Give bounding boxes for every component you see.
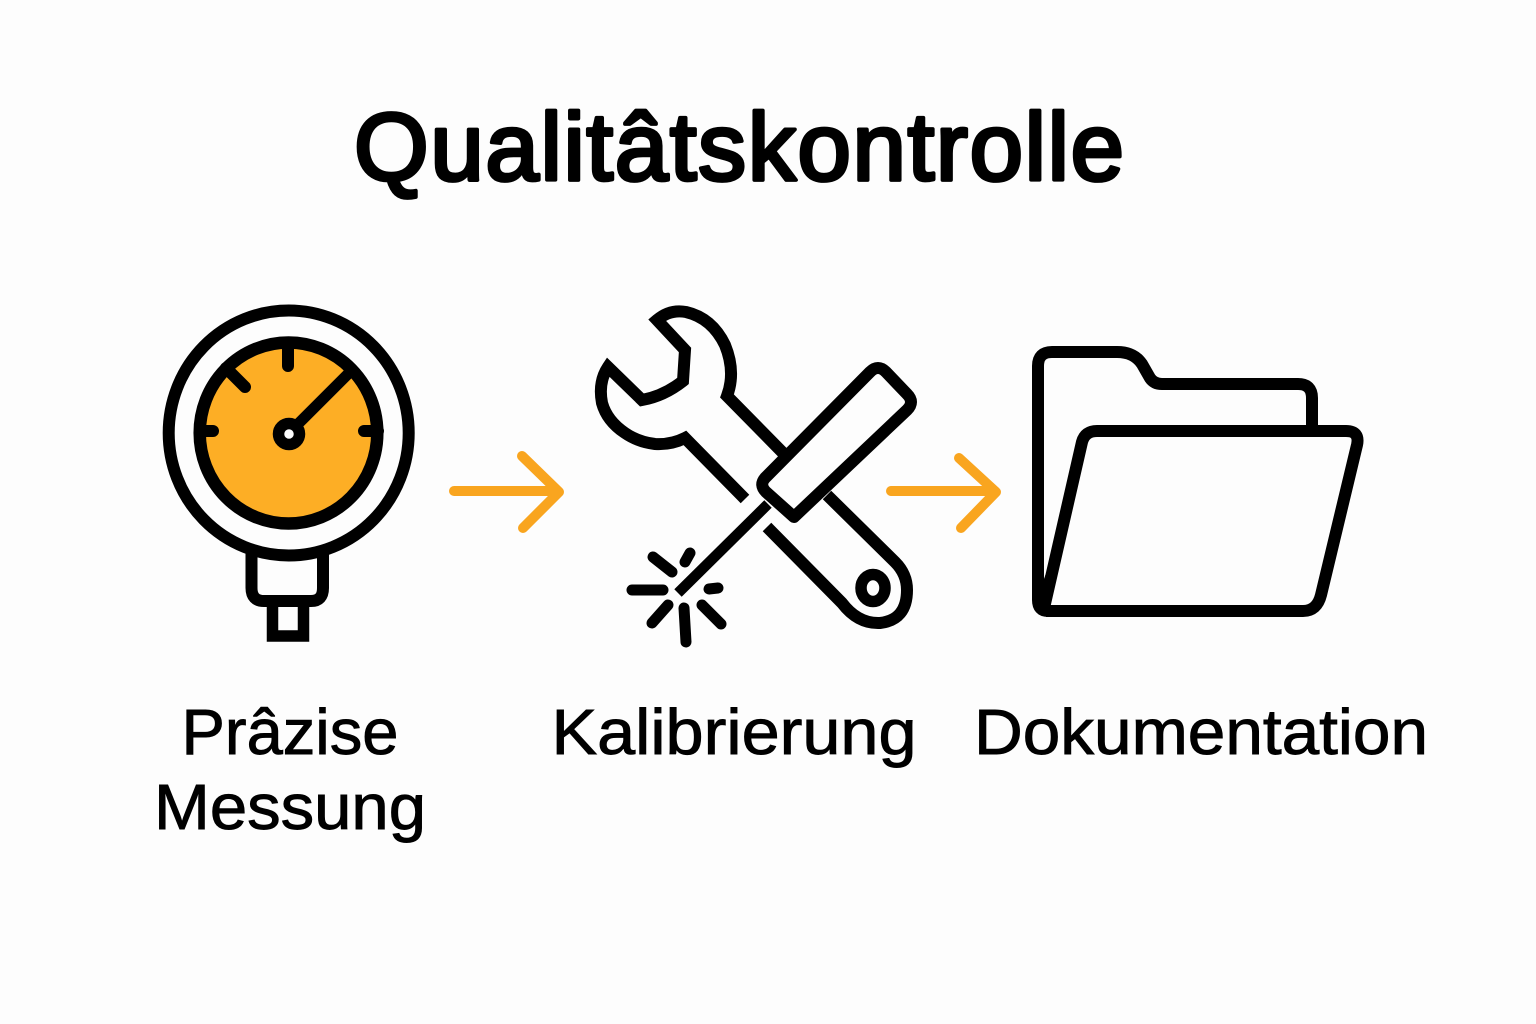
sparks	[632, 553, 721, 642]
arrow: step 2 to 3	[891, 458, 996, 528]
label: Präzise Messung: Messung	[154, 771, 426, 843]
label: Dokumentation: Dokumentation	[974, 696, 1428, 768]
label: Kalibrierung: Kalibrierung	[552, 696, 916, 768]
label: Präzise Messung	[154, 696, 426, 843]
screwdriver lower handle part	[767, 495, 907, 623]
screwdriver grip	[762, 368, 911, 517]
icon: wrench and screwdriver	[601, 311, 911, 642]
label: Präzise Messung: Prâzise	[182, 696, 398, 768]
handle hole	[861, 574, 885, 602]
wrench head and upper handle	[601, 311, 786, 499]
screwdriver shaft	[678, 504, 768, 593]
title: Qualitâtskontrolle	[354, 94, 1124, 201]
icon: folder	[1038, 352, 1358, 612]
icon: pressure gauge	[169, 310, 409, 636]
arrow: step 1 to 2	[454, 456, 559, 528]
